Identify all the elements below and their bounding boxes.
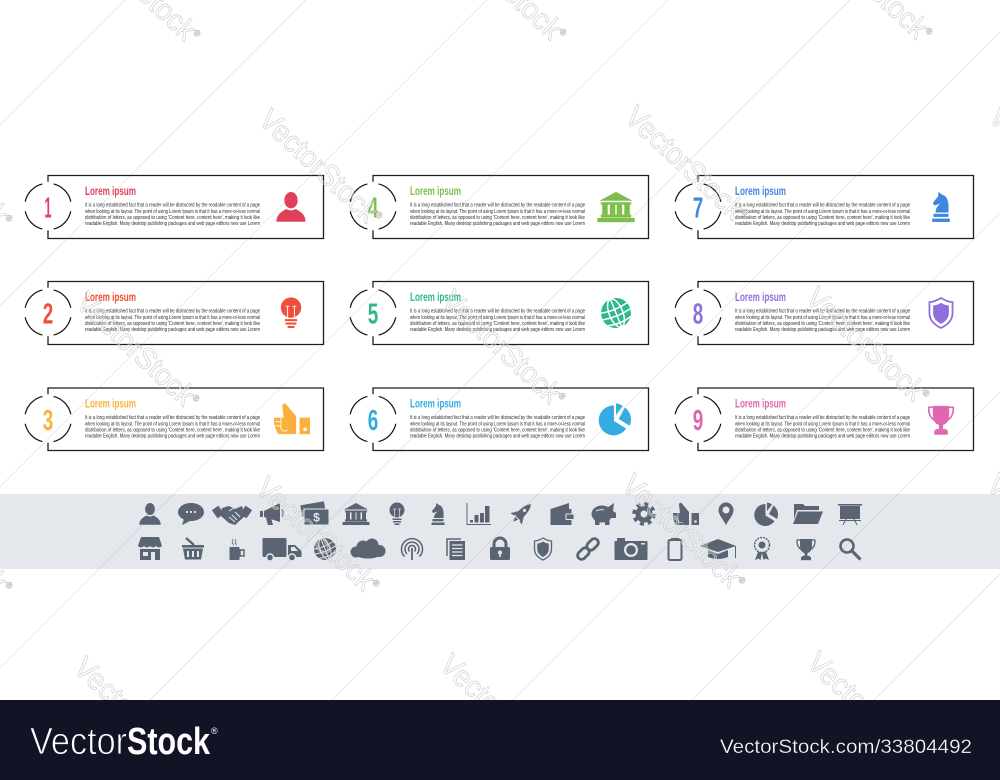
band icon: store: [138, 537, 162, 560]
watermarks: VectorStock: [799, 281, 939, 414]
watermarks: ®: [923, 26, 935, 37]
band icon: rocket: [508, 498, 537, 527]
band icon: thumbs up: [673, 503, 699, 525]
band icon: coffee mug: [230, 539, 244, 560]
panel: card 8: [675, 282, 974, 344]
watermarks: ®: [370, 578, 382, 589]
footer image id: VectorStock.com/33804492: [720, 737, 972, 758]
body text 7: readable English. Many desktop publishing packages and web page editors now use Lorem: [735, 221, 910, 227]
icon: globe: [597, 294, 635, 332]
watermarks: VectorStock: [800, 646, 940, 779]
panel: card 4: [350, 176, 648, 238]
body text 2: when looking at its layout. The point of using Lorem Ipsum is that it has a more-or-less normal: [84, 315, 260, 321]
body text 2: distribution of letters, as opposed to using 'Content here, content here', making it look like: [85, 321, 260, 327]
body text 8: when looking at its layout. The point of using Lorem Ipsum is that it has a more-or-less normal: [734, 315, 910, 321]
body text 6: readable English. Many desktop publishing packages and web page editors now use Lorem: [410, 434, 585, 440]
body text 7: when looking at its layout. The point of using Lorem Ipsum is that it has a more-or-less normal: [734, 209, 910, 215]
body text 2: [84, 308, 260, 333]
body text 9: It is a long established fact that a reader will be distracted by the readable content of a page: [735, 415, 910, 421]
panel: card 5: [350, 282, 648, 344]
band icon: money: [300, 501, 329, 525]
body text 8: readable English. Many desktop publishing packages and web page editors now use Lorem: [735, 327, 910, 333]
watermarks: VectorStock: [69, 286, 209, 419]
band icon: piggy bank: [592, 503, 616, 525]
body text 5: [409, 308, 585, 333]
watermarks: VectorStock: [435, 284, 575, 417]
body text 1: [84, 202, 260, 227]
body text 5: readable English. Many desktop publishing packages and web page editors now use Lorem: [410, 327, 585, 333]
body text 2: It is a long established fact that a reader will be distracted by the readable content of a page: [85, 308, 260, 314]
number ring 8: [675, 290, 721, 335]
number ring 9: [675, 396, 721, 442]
number ring 4: [350, 184, 396, 229]
number 2: 2: [43, 298, 53, 330]
panel: card 2: [25, 282, 323, 344]
body text 1: distribution of letters, as opposed to using 'Content here, content here', making it look like: [85, 215, 260, 221]
panel: card 1: [25, 176, 323, 238]
body text 4: distribution of letters, as opposed to using 'Content here, content here', making it look like: [410, 215, 585, 221]
body text 4: It is a long established fact that a reader will be distracted by the readable content of a page: [410, 202, 585, 208]
footer bar: [0, 700, 1000, 780]
heading 4: Lorem ipsum: [410, 186, 461, 198]
watermarks: ®: [373, 210, 385, 221]
number ring 5: [350, 290, 396, 335]
band icon: chess knight: [432, 503, 444, 525]
band icon: chain link: [576, 537, 600, 561]
band icon: presentation board: [838, 504, 862, 525]
band icon: trophy: [797, 539, 815, 560]
band icon: pie chart: [754, 502, 778, 526]
band icon: award ribbon: [754, 538, 770, 560]
band icon: bank: [342, 503, 370, 525]
icon: trophy: [929, 406, 953, 435]
watermarks: ®: [557, 27, 569, 38]
body text 1: readable English. Many desktop publishing packages and web page editors now use Lorem: [85, 221, 260, 227]
heading 9: Lorem ipsum: [735, 398, 786, 410]
icon row 2: [138, 535, 860, 563]
footer logo: Vector: Vector: [30, 721, 127, 763]
body text 7: It is a long established fact that a reader will be distracted by the readable content of a page: [735, 202, 910, 208]
body text 6: distribution of letters, as opposed to using 'Content here, content here', making it look like: [410, 428, 585, 434]
heading 1: Lorem ipsum: [85, 186, 136, 198]
icon: shield: [929, 298, 953, 328]
body text 4: [409, 202, 585, 227]
number ring 6: [350, 396, 396, 442]
band icon: handshake: [212, 506, 252, 525]
heading 3: Lorem ipsum: [85, 398, 136, 410]
band icon: cloud: [350, 538, 386, 558]
registered mark: ®: [211, 726, 218, 736]
band icon: documents: [447, 539, 465, 560]
band icon: graduation cap: [700, 539, 736, 559]
panel: card 6: [350, 388, 648, 450]
heading 8: Lorem ipsum: [735, 292, 786, 304]
watermarks: ®: [736, 575, 748, 586]
band icon: padlock: [490, 538, 510, 560]
number 6: 6: [368, 405, 378, 437]
body text 6: when looking at its layout. The point of using Lorem Ipsum is that it has a more-or-less normal: [409, 421, 585, 427]
body text 3: when looking at its layout. The point of using Lorem Ipsum is that it has a more-or-less normal: [84, 421, 260, 427]
band icon: gear: [634, 504, 654, 524]
body text 2: readable English. Many desktop publishing packages and web page editors now use Lorem: [85, 327, 260, 333]
body text 1: It is a long established fact that a reader will be distracted by the readable content of a page: [85, 202, 260, 208]
number ring 3: [25, 396, 71, 442]
panel: card 1: 1: [44, 192, 52, 224]
watermarks: ®: [3, 213, 15, 224]
band icon: map pin: [718, 502, 734, 525]
body text 5: when looking at its layout. The point of using Lorem Ipsum is that it has a more-or-less normal: [409, 315, 585, 321]
icon: chess knight: [932, 192, 950, 222]
body text 4: readable English. Many desktop publishing packages and web page editors now use Lorem: [410, 221, 585, 227]
watermarks: ®: [554, 755, 566, 766]
body text 3: readable English. Many desktop publishing packages and web page editors now use Lorem: [85, 434, 260, 440]
icon: pie chart: [599, 403, 631, 435]
band icon: bar chart: [467, 503, 491, 524]
body text 4: when looking at its layout. The point of using Lorem Ipsum is that it has a more-or-less normal: [409, 209, 585, 215]
band icon: clipboard: [668, 538, 682, 560]
body text 9: when looking at its layout. The point of using Lorem Ipsum is that it has a more-or-less normal: [734, 421, 910, 427]
number ring 7: [675, 184, 721, 229]
body text 9: [734, 415, 910, 440]
watermarks: ®: [920, 388, 932, 399]
watermarks: ®: [921, 753, 933, 764]
panel: card 9: [675, 388, 974, 450]
body text 8: distribution of letters, as opposed to using 'Content here, content here', making it look like: [735, 321, 910, 327]
watermarks: ®: [3, 580, 15, 591]
number 4: 4: [368, 192, 378, 224]
number 7: 7: [693, 192, 703, 224]
number ring 2: [25, 290, 71, 335]
body text 3: It is a long established fact that a reader will be distracted by the readable content of a page: [85, 415, 260, 421]
number ring 1: [25, 184, 71, 229]
number 8: 8: [693, 298, 703, 330]
band icon: speech bubble: [178, 503, 204, 525]
band icon: folder: [793, 504, 823, 524]
number 5: 5: [368, 298, 378, 330]
icon: person: [276, 192, 306, 222]
body text 9: readable English. Many desktop publishing packages and web page editors now use Lorem: [735, 434, 910, 440]
watermarks: ®: [188, 758, 200, 769]
icon: bank: [597, 192, 635, 222]
watermarks: ®: [190, 393, 202, 404]
watermarks: ®: [739, 207, 751, 218]
body text 5: It is a long established fact that a reader will be distracted by the readable content of a page: [410, 308, 585, 314]
body text 7: distribution of letters, as opposed to using 'Content here, content here', making it look like: [735, 215, 910, 221]
heading 2: Lorem ipsum: [85, 292, 136, 304]
body text 7: [734, 202, 910, 227]
body text 1: when looking at its layout. The point of using Lorem Ipsum is that it has a more-or-less normal: [84, 209, 260, 215]
panel: icon band: [0, 494, 1000, 569]
body text 8: It is a long established fact that a reader will be distracted by the readable content of a page: [735, 308, 910, 314]
heading 7: Lorem ipsum: [735, 186, 786, 198]
band icon: camera: [614, 538, 648, 560]
icon: thumbs up: [274, 403, 310, 434]
body text 9: distribution of letters, as opposed to using 'Content here, content here', making it look like: [735, 428, 910, 434]
band icon: person: [139, 503, 161, 525]
body text 8: [734, 308, 910, 333]
body text 5: distribution of letters, as opposed to using 'Content here, content here', making it look like: [410, 321, 585, 327]
band icon: shield: [534, 538, 552, 560]
heading 5: Lorem ipsum: [410, 292, 461, 304]
band icon: signal: [402, 539, 422, 560]
watermarks: ®: [556, 391, 568, 402]
band icon: globe: [311, 535, 339, 563]
footer logo: Stock: Stock: [127, 721, 211, 763]
band icon: megaphone: [260, 503, 283, 525]
band icon: magnifier: [840, 540, 860, 560]
panel: card 3: [25, 388, 323, 450]
number 9: 9: [693, 405, 703, 437]
band icon: wallet: [550, 503, 574, 525]
heading 6: Lorem ipsum: [410, 398, 461, 410]
body text 3: [84, 415, 260, 440]
icon: light bulb: [281, 297, 301, 328]
watermarks: ®: [191, 28, 203, 39]
watermarks: VectorStock: [252, 103, 392, 236]
band icon: basket: [182, 538, 204, 560]
watermarks: VectorStock: [615, 468, 755, 601]
icon row 1: [139, 498, 862, 527]
body text 6: It is a long established fact that a reader will be distracted by the readable content of a page: [410, 415, 585, 421]
watermarks: VectorStock: [618, 100, 758, 233]
watermarks: VectorStock: [433, 648, 573, 780]
band icon: light bulb: [390, 502, 404, 525]
band icon: delivery truck: [262, 538, 302, 561]
band icon: money: $: [313, 510, 320, 524]
panel: card 7: [675, 176, 974, 238]
body text 6: [409, 415, 585, 440]
watermarks: VectorStock: [249, 471, 389, 604]
body text 3: distribution of letters, as opposed to using 'Content here, content here', making it look like: [85, 428, 260, 434]
number 3: 3: [43, 405, 53, 437]
